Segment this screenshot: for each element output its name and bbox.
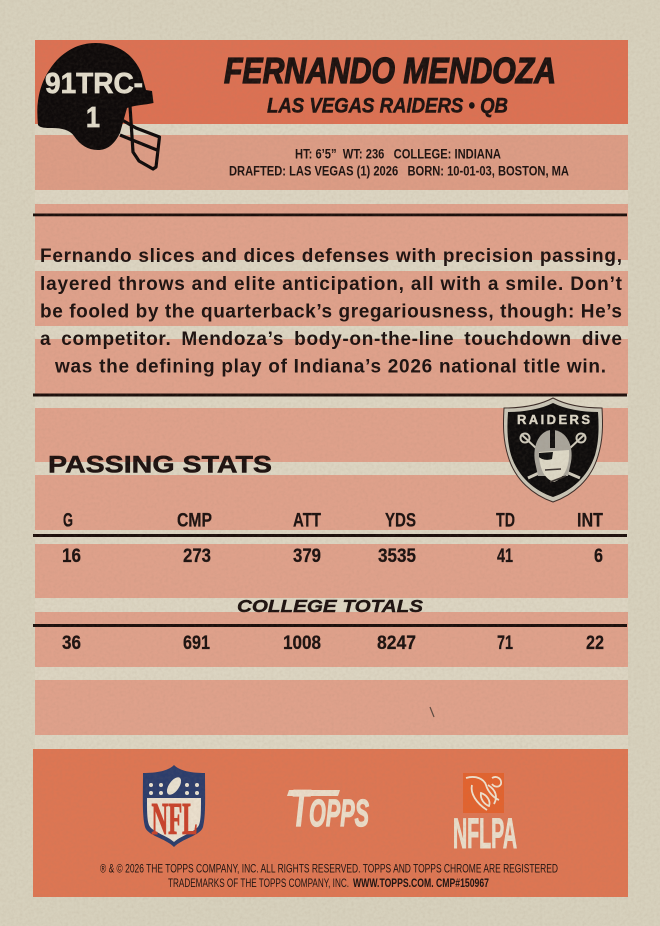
biography text: was the defining play of Indiana’s 2026 national title win. — [54, 356, 606, 378]
season stats row: 16 — [62, 546, 81, 567]
paper speck — [430, 707, 434, 717]
logo: topps — [287, 780, 369, 838]
stats table headers: YDS — [385, 510, 416, 532]
biography text: be fooled by the quarterback’s gregariousness, though: He’s — [40, 302, 622, 322]
card number: 91TRC- — [45, 68, 143, 100]
legal copy: TRADEMARKS OF THE TOPPS COMPANY, INC. — [168, 876, 349, 890]
season stats row — [62, 546, 603, 567]
season stats row: 273 — [183, 546, 211, 567]
college totals row — [62, 633, 604, 654]
college totals row: 71 — [497, 633, 513, 654]
stats table headers: ATT — [293, 510, 321, 532]
player vitals — [229, 146, 569, 178]
rule lines — [33, 214, 627, 627]
player vitals: DRAFTED: LAS VEGAS (1) 2026 BORN: 10-01-03, BOSTON, MA — [229, 164, 569, 178]
player vitals: HT: 6’5” WT: 236 COLLEGE: INDIANA — [295, 146, 501, 162]
stats table headers: TD — [496, 510, 515, 532]
stats table headers: G — [63, 510, 73, 532]
shield wordmark: RAIDERS — [517, 412, 590, 427]
legal copy — [100, 862, 558, 890]
season stats row: 379 — [293, 546, 321, 567]
pirate head — [534, 430, 572, 476]
season stats row: 3535 — [378, 546, 416, 567]
team and position: LAS VEGAS RAIDERS • QB — [267, 94, 508, 118]
stats table headers: CMP — [177, 510, 212, 532]
stats table headers: INT — [577, 510, 603, 532]
college totals row: 22 — [586, 633, 604, 654]
heading: passing stats: PASSING STATS — [48, 452, 272, 478]
icon: raiders shield — [503, 398, 603, 502]
college totals row: 36 — [62, 633, 81, 654]
college totals row: 691 — [183, 633, 210, 654]
biography text: Fernando slices and dices defenses with precision passing, — [40, 246, 622, 267]
shield stars — [149, 783, 199, 795]
stats table headers — [63, 510, 603, 532]
heading: college totals: COLLEGE TOTALS — [237, 596, 423, 616]
card number second line: 1 — [86, 102, 100, 134]
NFL wordmark: NFL — [152, 793, 198, 844]
card back: NFLPA — [453, 810, 517, 858]
crossed swords — [520, 434, 586, 478]
biography text: layered throws and elite anticipation, all with a smile. Don’t — [40, 274, 623, 295]
topps wordmark: TOPPS — [291, 780, 369, 838]
season stats row: 6 — [594, 546, 603, 567]
legal copy: WWW.TOPPS.COM. CMP#150967 — [353, 876, 489, 890]
icon: helmet with card number — [37, 43, 160, 169]
biography text — [40, 246, 623, 378]
college totals row: 1008 — [283, 633, 321, 654]
season stats row: 41 — [497, 546, 513, 567]
logo: NFLPA — [453, 773, 517, 858]
college totals row: 8247 — [377, 633, 416, 654]
player name: FERNANDO MENDOZA — [224, 50, 556, 91]
icon: NFL shield — [143, 765, 205, 847]
biography text: a competitor. Mendoza’s body-on-the-line touchdown dive — [40, 329, 622, 350]
